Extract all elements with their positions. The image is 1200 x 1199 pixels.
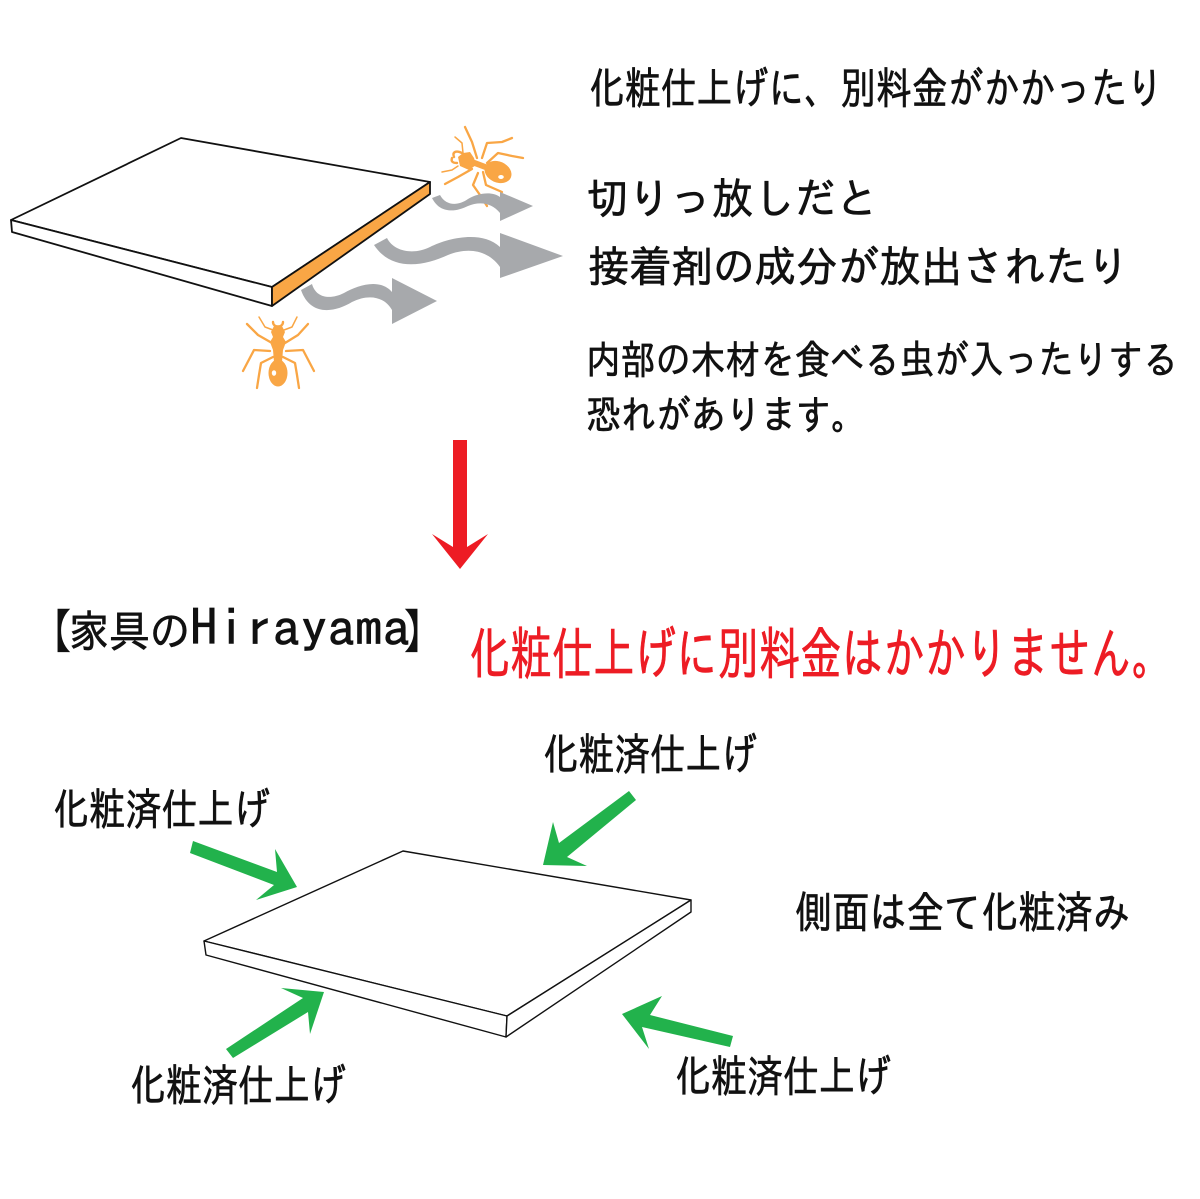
grey emission arrow top	[432, 192, 533, 221]
heading: Hirayama brand: 】	[403, 607, 450, 654]
text line 2: 切りっ放しだと	[587, 177, 878, 220]
arrow: green upper right	[543, 791, 636, 866]
icon: ant bottom	[243, 317, 314, 388]
text line 3: 接着剤の成分が放出されたり	[588, 245, 1129, 288]
icon: ant upper right	[442, 127, 523, 206]
grey emission arrow middle	[374, 233, 563, 278]
heading: Hirayama brand	[25, 603, 450, 654]
grey emission arrow bottom	[301, 278, 437, 324]
heading: Hirayama brand: 家具の	[69, 609, 190, 653]
heading: Hirayama brand: Hirayama	[190, 603, 410, 653]
heading: Hirayama brand: 【	[25, 607, 72, 654]
text line 5: 恐れがあります。	[586, 394, 866, 434]
arrow: red down arrow	[432, 440, 488, 569]
text block: problems with other companies	[586, 66, 1178, 434]
board	[204, 851, 691, 1037]
label: bottom: 化粧済仕上げ	[130, 1063, 346, 1107]
exposed orange edge	[272, 182, 430, 306]
text: all sides finished: 側面は全て化粧済み	[795, 890, 1130, 934]
arrow: green upper left	[190, 841, 297, 900]
label: left: 化粧済仕上げ	[53, 787, 270, 831]
label: top: 化粧済仕上げ	[543, 732, 757, 776]
arrow: green lower right	[622, 996, 733, 1049]
label: right: 化粧済仕上げ	[675, 1054, 891, 1098]
diagram: cut-edge board with ants and emissions	[11, 127, 563, 388]
board with unfinished edge	[11, 138, 430, 306]
diagram: fully finished board	[53, 732, 891, 1107]
arrow: green lower left	[226, 988, 324, 1058]
